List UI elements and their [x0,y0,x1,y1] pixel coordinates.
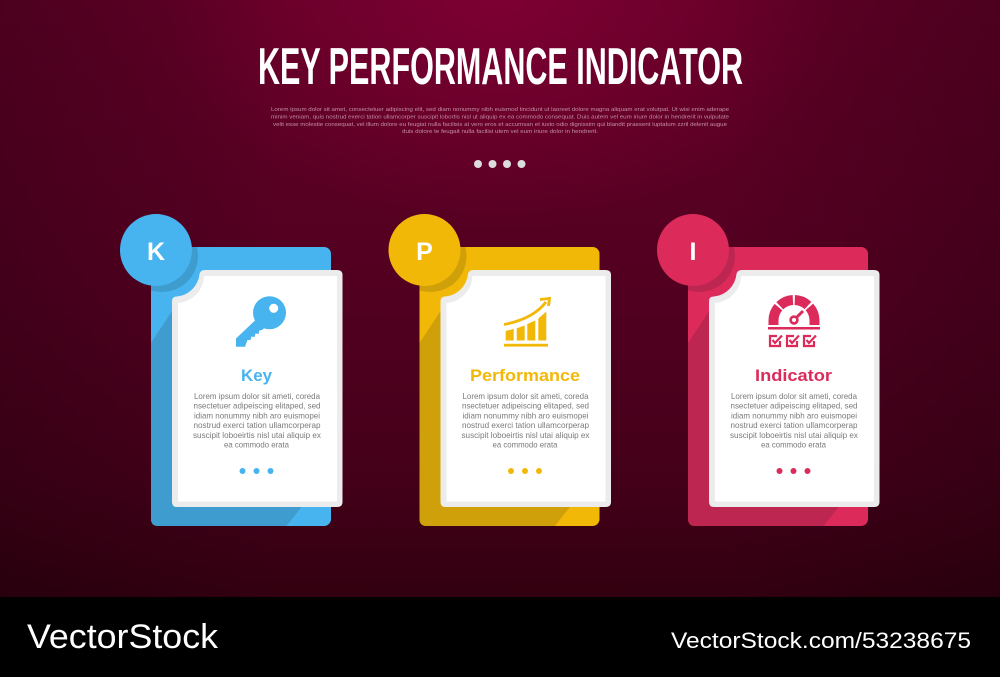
footer band [0,597,1000,677]
body text: indicator: ea commodo erata [761,440,826,450]
heading: key: Key [241,366,273,385]
dots: key [240,468,274,474]
body text: performance: Lorem ipsum dolor sit ameti, coreda [462,391,589,401]
badge: K: K [147,238,165,266]
intro text: duis dolore te feugait nulla facilisi utem vel eum iriure dolor in hendrerit. [402,129,598,135]
body text: indicator: idiam nonummy nibh aro euismopei [731,410,857,420]
body text: performance: ea commodo erata [492,440,558,450]
body text: key: ea commodo erata [224,440,289,450]
body text: key: idiam nonummy nibh aro euismopei [194,410,320,420]
badge: I: I [690,238,696,266]
footer url: VectorStock.com/53238675 [671,628,971,653]
body text: key: nostrud exerci tation ullamcorperap [194,420,321,430]
body text: performance: idiam nonummy nibh aro euismopei [462,410,589,420]
body text: key [193,391,322,450]
badge: I [657,214,729,286]
icon: key [236,296,286,347]
intro text: Lorem ipsum dolor sit amet, consectetuer adipiscing elit, sed diam nonummy nibh euismod tincidunt ut laoreet dolore magna aliquam erat volutpat. Ut wisi enim aderape [271,107,729,113]
body text: indicator: nostrud exerci tation ullamcorperap [730,420,858,430]
badge: P [388,214,460,286]
heading: performance: Performance [470,366,580,385]
body text: performance [462,391,590,450]
intro text [271,107,729,135]
body text: performance: suscipit loboeirtis nisl utai aliquip ex [462,430,590,440]
panel: performance [388,214,611,526]
panel: indicator [657,214,880,526]
body text: key: nsectetuer adipeiscing elitaped, sed [194,401,321,411]
body text: indicator: suscipit loboeirtis nisl utai aliquip ex [730,430,859,440]
header dots [474,160,526,168]
dots: indicator [776,468,810,474]
icon: gauge with checkboxes [768,300,820,346]
badge: K [120,214,192,286]
panel: key [120,214,342,526]
body text: indicator: Lorem ipsum dolor sit ameti, coreda [731,391,857,401]
body text: performance: nostrud exerci tation ullamcorperap [462,420,589,430]
body text: performance: nsectetuer adipeiscing elitaped, sed [462,401,589,411]
heading: indicator: Indicator [755,366,832,385]
intro text: velit esse molestie consequat, vel illum dolore eu feugiat nulla facilisis at vero eros et accumsan et iusto odio dignissim qui blandit praesent luptatum zzril delenit augue [273,122,727,128]
intro text: minim veniam, quis nostrud exerci tation ullamcorper suscipit lobortis nisl ut aliquip ex ea commodo consequat. Duis autem vel eum iriure dolor in hendrerit in vulputate [271,114,729,120]
body text: key: Lorem ipsum dolor sit ameti, coreda [194,391,320,401]
body text: indicator: nsectetuer adipeiscing elitaped, sed [730,401,858,411]
dots: performance [508,468,542,474]
body text: indicator [730,391,859,450]
body text: key: suscipit loboeirtis nisl utai aliquip ex [193,430,322,440]
footer logo: VectorStock [27,618,219,656]
badge: P: P [416,238,433,266]
icon: growth chart [504,298,550,347]
